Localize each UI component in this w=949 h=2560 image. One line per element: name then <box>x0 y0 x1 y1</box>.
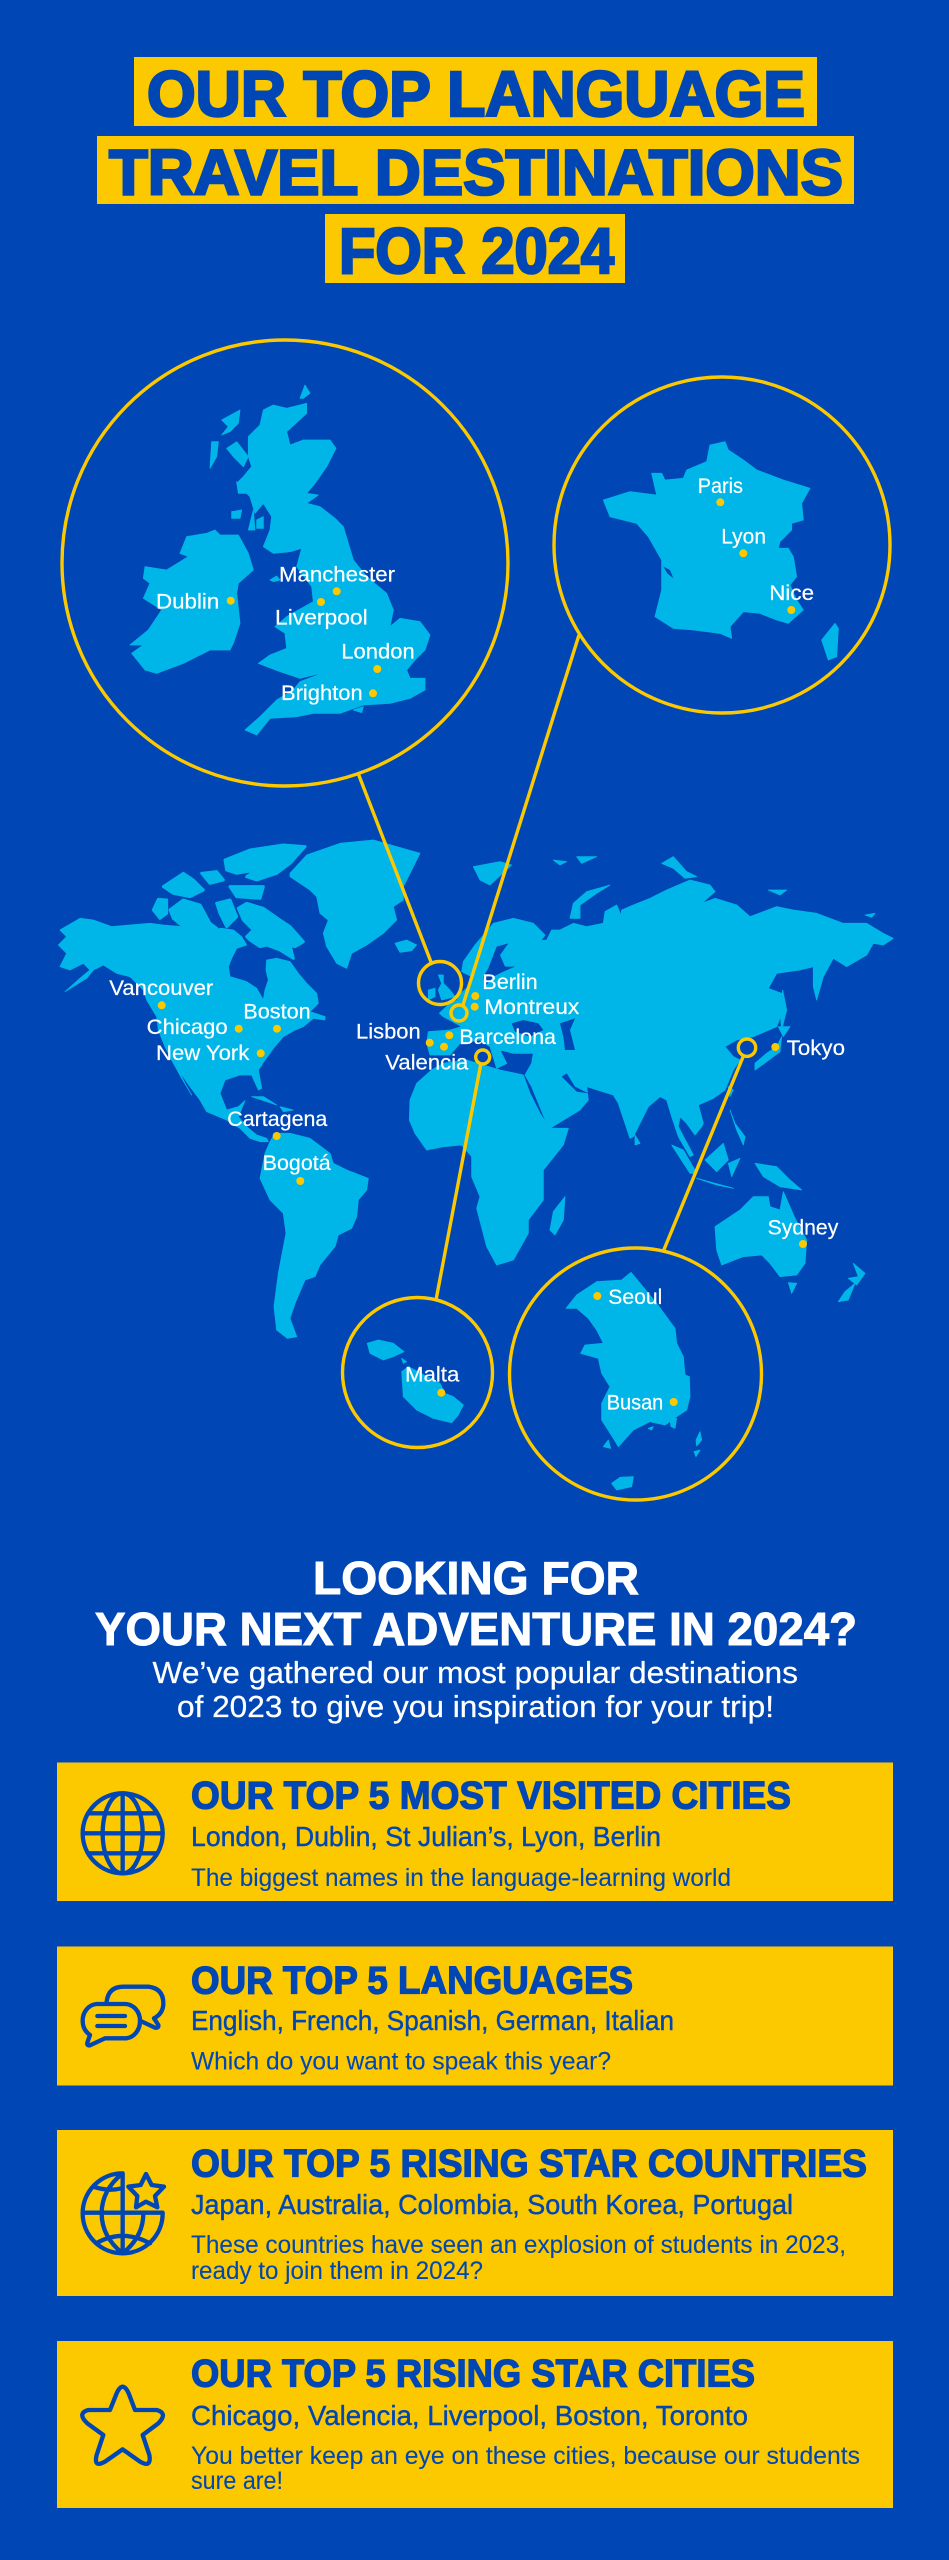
heading: looking for your next adventure: LOOKING FOR <box>313 1552 639 1604</box>
icon: globe <box>83 1793 163 1873</box>
city: Manchester <box>279 563 395 595</box>
city: Liverpool <box>275 598 368 629</box>
map: Malta <box>367 1340 463 1423</box>
city: Nice <box>769 582 814 614</box>
icon: star <box>82 2387 163 2464</box>
Africa, Eurasia, Australia and islands <box>409 857 893 1302</box>
locator ring: UK <box>418 962 462 1004</box>
city: Manchester: Manchester <box>279 563 395 586</box>
panel: rising star countries: Japan, Australia, Colombia, South Korea, Portugal <box>191 2189 793 2220</box>
locator ring: France <box>451 1005 467 1021</box>
city: Chicago: Chicago <box>147 1016 228 1039</box>
title: OUR TOP LANGUAGE <box>147 58 805 130</box>
icon: globe with star <box>83 2173 164 2253</box>
panel: rising star cities: sure are! <box>191 2467 283 2495</box>
intro text <box>152 1655 798 1724</box>
city: Berlin: Berlin <box>482 971 538 994</box>
panel: most visited cities <box>57 1762 893 1901</box>
panel: rising star cities: You better keep an eye on these cities, because our students <box>191 2442 860 2470</box>
intro text: of 2023 to give you inspiration for your trip! <box>177 1689 774 1724</box>
title <box>97 57 854 287</box>
panel: rising star countries: ready to join them in 2024? <box>191 2257 483 2285</box>
connector: UK <box>358 773 431 962</box>
title: TRAVEL DESTINATIONS <box>109 136 843 208</box>
city: Bogotá <box>263 1152 331 1185</box>
zoom circle: South Korea <box>510 1248 762 1500</box>
city: Montreux: Montreux <box>484 996 580 1019</box>
map: South Korea <box>566 1272 702 1490</box>
panel: rising star countries: OUR TOP 5 RISING STAR COUNTRIES <box>191 2142 867 2186</box>
city: Valencia: Valencia <box>385 1051 469 1074</box>
city: Busan: Busan <box>607 1391 663 1414</box>
map: France <box>603 442 838 660</box>
panel: most visited cities: OUR TOP 5 MOST VISITED CITIES <box>191 1774 791 1818</box>
heading: looking for your next adventure: YOUR NEXT ADVENTURE IN 2024? <box>95 1603 857 1655</box>
city: Paris: Paris <box>698 475 743 498</box>
heading: looking for your next adventure <box>95 1552 857 1655</box>
panel: rising star countries <box>57 2130 893 2296</box>
panel: rising star countries: These countries have seen an explosion of students in 2023, <box>191 2231 846 2259</box>
panel: rising star cities <box>57 2341 893 2508</box>
panel: top languages <box>57 1946 893 2086</box>
city: Vancouver <box>109 977 213 1009</box>
panel: top languages: Which do you want to speak this year? <box>191 2048 611 2076</box>
intro text: We’ve gathered our most popular destinations <box>152 1655 798 1690</box>
city: Vancouver: Vancouver <box>109 977 213 1000</box>
city: Malta: Malta <box>405 1364 460 1387</box>
South America <box>260 1133 368 1338</box>
connector: Malta <box>436 1063 481 1300</box>
panel: top languages: English, French, Spanish, German, Italian <box>191 2005 674 2036</box>
city: Boston <box>243 1000 311 1033</box>
city: Malta <box>405 1364 460 1397</box>
city: Lisbon: Lisbon <box>356 1020 421 1043</box>
title: FOR 2024 <box>339 215 614 287</box>
panel: most visited cities: The biggest names in the language-learning world <box>191 1864 731 1892</box>
city: Tokyo: Tokyo <box>787 1037 845 1060</box>
panel: rising star cities: OUR TOP 5 RISING STAR CITIES <box>191 2352 755 2396</box>
city: Sydney: Sydney <box>768 1216 839 1239</box>
connector: France <box>463 635 579 1005</box>
city: Lisbon <box>356 1020 434 1047</box>
city: Berlin <box>471 971 538 1000</box>
zoom circle: UK and Ireland <box>62 340 508 786</box>
connector: Korea <box>663 1057 743 1252</box>
city: Brighton: Brighton <box>281 682 363 705</box>
city: Boston: Boston <box>243 1000 311 1023</box>
zoom circle: France <box>554 377 890 713</box>
world map <box>58 840 893 1338</box>
North America and Greenland <box>58 840 420 1142</box>
locator ring: Malta <box>476 1050 490 1064</box>
panel: top languages: OUR TOP 5 LANGUAGES <box>191 1960 633 2002</box>
city: London: London <box>341 641 415 664</box>
city: Seoul: Seoul <box>608 1286 662 1309</box>
map: Great Britain and Ireland <box>130 385 430 735</box>
panel: most visited cities: London, Dublin, St Julian’s, Lyon, Berlin <box>191 1821 661 1852</box>
city: Dublin: Dublin <box>156 591 219 614</box>
city: Barcelona: Barcelona <box>459 1026 556 1049</box>
panel: rising star cities: Chicago, Valencia, Liverpool, Boston, Toronto <box>191 2400 748 2431</box>
city: Bogotá: Bogotá <box>263 1152 331 1175</box>
zoom circle: Malta <box>342 1298 492 1448</box>
city: New York: New York <box>156 1042 250 1065</box>
icon: speech bubbles <box>83 1987 163 2045</box>
city: Cartagena: Cartagena <box>227 1108 328 1131</box>
city: Lyon: Lyon <box>721 526 766 549</box>
city: Valencia <box>385 1043 469 1074</box>
city: London <box>341 641 415 673</box>
locator ring: Korea <box>738 1039 756 1056</box>
city: Liverpool: Liverpool <box>275 606 368 629</box>
city: Nice: Nice <box>769 582 814 605</box>
